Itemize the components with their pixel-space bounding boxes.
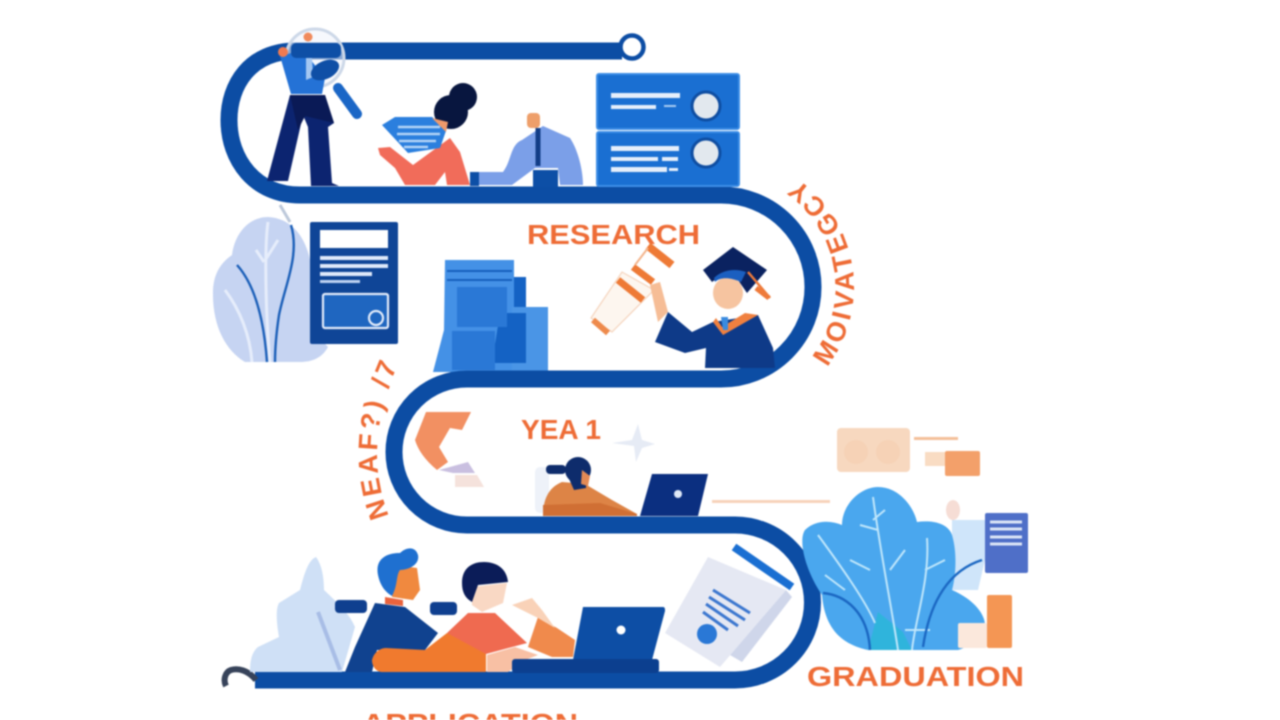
person: woman holding folders bbox=[378, 83, 477, 185]
icon: diploma scroll bbox=[591, 246, 672, 333]
icon: stacked binders bbox=[597, 74, 739, 186]
icon: large blue plant bbox=[802, 487, 985, 650]
label: research: RESEARCH bbox=[527, 219, 700, 250]
icon: pale plant at application stage bbox=[250, 557, 355, 672]
label: graduation: GRADUATION bbox=[807, 661, 1024, 692]
icon: pale peach cards bbox=[712, 428, 980, 503]
icon: orange folded shape bbox=[415, 412, 484, 487]
icon: stacked blue books bbox=[433, 260, 548, 372]
icon: application laptop bbox=[512, 607, 665, 673]
icon: student laptop bbox=[640, 474, 708, 516]
icon: blue document card bbox=[310, 222, 398, 344]
person: graduate in cap and gown bbox=[650, 247, 775, 368]
icon: path end hook bbox=[225, 669, 256, 686]
icon: diploma paper bbox=[665, 547, 792, 667]
winding path band bbox=[229, 51, 813, 680]
label: year 1: YEA 1 bbox=[521, 414, 601, 445]
person: student at laptop bbox=[535, 457, 637, 516]
label: curved near text: NEAF?) /7 bbox=[358, 358, 396, 521]
person: researcher with magnifying glass bbox=[267, 29, 357, 186]
person: man in blue shirt bbox=[470, 113, 583, 187]
person: man studying bbox=[335, 548, 486, 672]
icon: side document and blocks bbox=[958, 513, 1028, 648]
icon: path start ring bbox=[620, 36, 644, 58]
person: woman studying bbox=[447, 562, 575, 672]
label: curved motivation text: MOIVATEGCY bbox=[786, 182, 856, 366]
icon: pale plant behind document bbox=[213, 205, 328, 362]
icon: pale sparkle bbox=[612, 424, 655, 462]
